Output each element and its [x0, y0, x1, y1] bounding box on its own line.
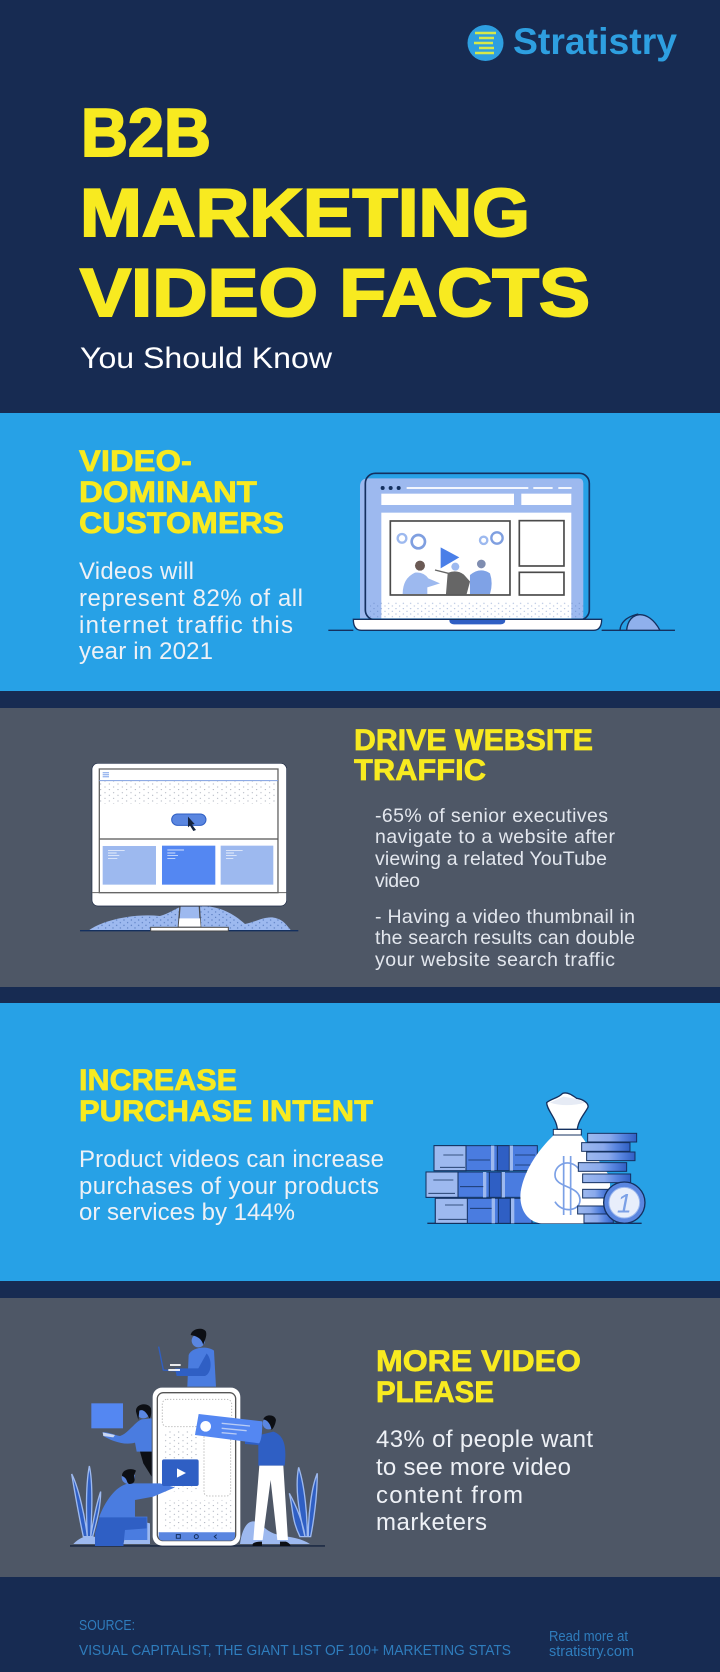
- heading: MORE VIDEO: [376, 1345, 581, 1378]
- heading: PURCHASE INTENT: [79, 1095, 373, 1128]
- panel: increase purchase intent: [0, 1003, 720, 1281]
- heading: PLEASE: [376, 1376, 494, 1409]
- body text: represent 82% of all: [79, 585, 303, 612]
- panel: video-dominant customers: [0, 413, 720, 691]
- body text: year in 2021: [79, 638, 213, 665]
- body text: marketers: [376, 1509, 487, 1536]
- logo: Stratistry: [513, 21, 677, 62]
- heading: DRIVE WEBSITE: [354, 724, 593, 757]
- source credit: SOURCE:: [79, 1617, 135, 1634]
- body text: second fact: your website search traffic: [375, 949, 615, 971]
- header: [80, 21, 677, 375]
- panel: drive website traffic: [0, 708, 720, 987]
- icon: money bag, bills and coins: 1: [617, 1189, 632, 1219]
- title: MARKETING: [80, 175, 530, 251]
- title: [80, 95, 590, 331]
- icon: desktop monitor: [80, 763, 298, 931]
- icon: laptop with video: [328, 473, 675, 630]
- title: B2B: [81, 95, 211, 171]
- title: VIDEO FACTS: [80, 255, 590, 331]
- heading: VIDEO-: [79, 445, 192, 478]
- body text: Videos will: [79, 558, 194, 585]
- icon: money bag, bills and coins: [426, 1093, 645, 1223]
- source credit: VISUAL CAPITALIST, THE GIANT LIST OF 100+ MARKETING STATS: [79, 1642, 511, 1659]
- body text: 43% of people want: [376, 1426, 593, 1453]
- footer: [79, 1617, 634, 1660]
- icon: team building a phone app: [70, 1329, 325, 1546]
- body text: or services by 144%: [79, 1199, 295, 1226]
- heading: TRAFFIC: [354, 754, 486, 787]
- body text: internet traffic this: [79, 612, 293, 639]
- heading: INCREASE: [79, 1064, 237, 1097]
- subtitle: You Should Know: [80, 342, 332, 375]
- heading: DOMINANT: [79, 476, 257, 509]
- body text: Product videos can increase: [79, 1146, 384, 1173]
- body text: purchases of your products: [79, 1173, 379, 1200]
- body text: first fact: video: [375, 870, 420, 892]
- body text: first fact: -65% of senior executives: [375, 805, 608, 827]
- body text: second fact: - Having a video thumbnail in: [375, 906, 635, 928]
- read more link text: Read more at: [549, 1629, 628, 1645]
- body text: first fact: navigate to a website after: [375, 826, 616, 848]
- body text: content from: [376, 1482, 523, 1509]
- panel: more video please: [0, 1298, 720, 1577]
- read more link text: stratistry.com: [549, 1644, 634, 1660]
- body text: to see more video: [376, 1454, 571, 1481]
- body text: second fact: the search results can double: [375, 927, 635, 949]
- body text: first fact: viewing a related YouTube: [375, 848, 607, 870]
- heading: CUSTOMERS: [79, 507, 284, 540]
